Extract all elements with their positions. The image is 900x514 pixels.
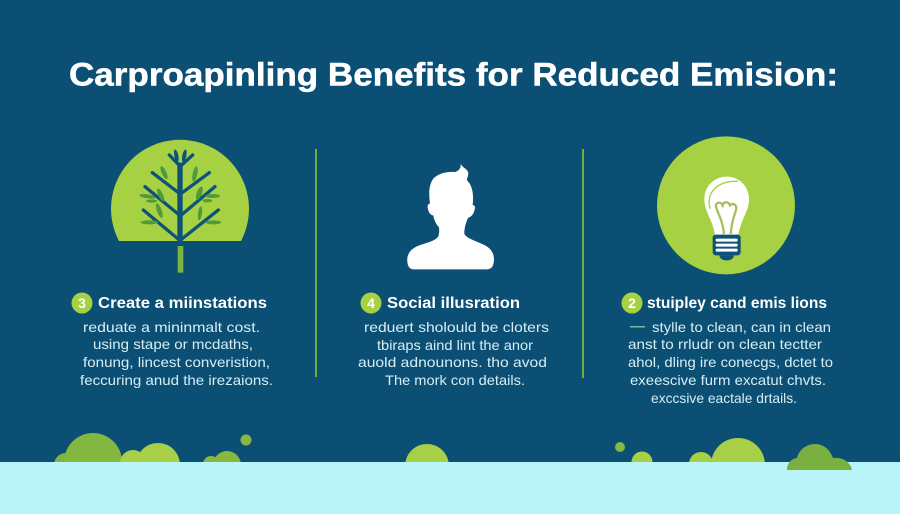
text block: right body: exccsive eactale drtails. <box>651 390 797 406</box>
panel: person column <box>358 163 549 388</box>
bushes on the horizon <box>54 433 765 492</box>
bush overlapping the band <box>787 444 852 470</box>
text block: left body: reduate a mininmalt cost. <box>83 319 260 335</box>
heading: Create a minstations: 3 <box>78 295 86 311</box>
text block: right body: anst to rrludr on clean tectter <box>628 336 822 352</box>
panel: light bulb column <box>622 136 833 406</box>
icon: person silhouette <box>407 163 494 269</box>
heading: stuipley cand emis lions: 2 <box>628 295 636 311</box>
text block: left body <box>80 319 273 388</box>
text block: middle body: tbiraps aind lint the anor <box>377 337 533 353</box>
heading: Create a minstations <box>72 292 267 314</box>
text block: right body: ahol, dling ire conecgs, dctet to <box>628 354 833 370</box>
text block: middle body <box>358 319 549 388</box>
text block: right body <box>628 319 833 406</box>
text block: middle body: auold adnounons. tho avod <box>358 354 547 370</box>
text block: left body: using stape or mcdaths, <box>93 336 253 352</box>
icon: tree in green dome <box>111 140 249 273</box>
heading: stuipley cand emis lions: stuipley cand emis lions <box>647 295 827 312</box>
text block: middle body: reduert sholould be cloters <box>364 319 549 335</box>
text block: right body: stylle to clean, can in clean <box>652 319 831 335</box>
panel: tree column <box>72 140 273 388</box>
heading: Create a minstations: Create a miinstations <box>98 295 267 312</box>
icon: light bulb in green circle <box>657 136 795 274</box>
heading: Social illusration <box>360 292 520 314</box>
text block: right body: exeescive furm excatut chvts. <box>630 372 826 388</box>
heading: Social illusration: 4 <box>367 295 375 311</box>
ground band <box>0 462 900 514</box>
title: Carproapinling Benefits for Reduced Emision: <box>69 56 838 92</box>
text block: middle body: The mork con details. <box>385 372 525 388</box>
text block: left body: fonung, lincest converistion, <box>83 354 270 370</box>
text block: left body: feccuring anud the irezaions. <box>80 372 273 388</box>
heading: Social illusration: Social illusration <box>387 295 520 312</box>
